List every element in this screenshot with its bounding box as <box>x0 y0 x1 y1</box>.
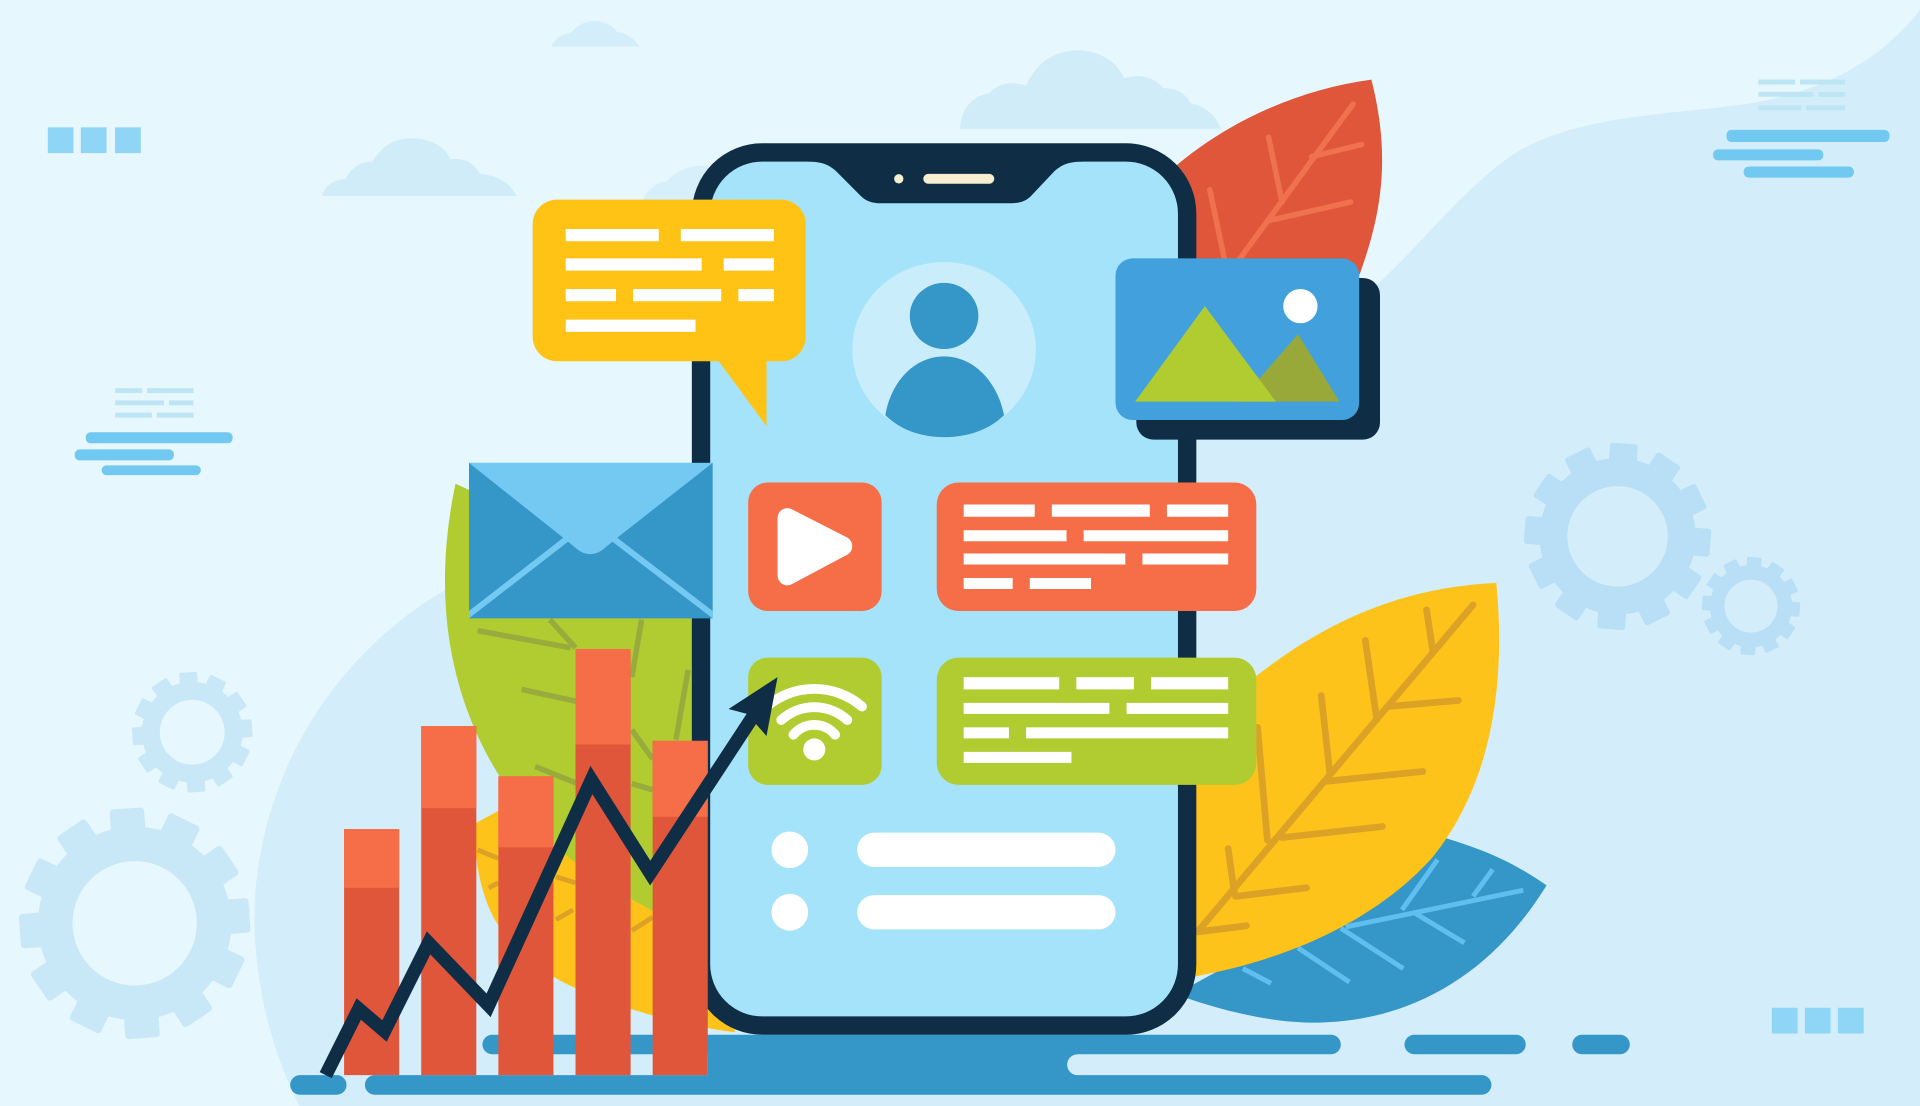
decorative lines: right <box>1713 80 1889 178</box>
green text card <box>937 658 1256 785</box>
bar 1 <box>344 829 399 1075</box>
gear: right large <box>1518 437 1717 636</box>
gear: left large <box>12 800 258 1046</box>
list dots and pills <box>771 831 1116 931</box>
ground bars <box>290 1035 1630 1095</box>
squares: bottom right <box>1772 1008 1864 1033</box>
wifi card <box>748 658 882 785</box>
cloud: behind phone <box>643 165 722 201</box>
cloud: centre large <box>960 50 1221 129</box>
trend arrow <box>326 677 778 1075</box>
leaf: blue <box>1176 835 1547 1023</box>
phone <box>701 152 1187 1026</box>
bar 5 <box>653 741 708 1075</box>
decorative lines: left <box>75 388 233 475</box>
phone body <box>701 152 1187 1026</box>
bar 2 <box>421 726 476 1075</box>
envelope <box>469 463 713 618</box>
leaf: red <box>1169 80 1382 276</box>
orange text card <box>937 482 1256 611</box>
leaf: yellow small <box>475 802 735 1032</box>
bar 4 <box>576 649 631 1075</box>
cloud: left <box>322 138 517 196</box>
speech bubble <box>533 200 806 426</box>
bar 3 <box>498 776 553 1075</box>
bar chart <box>344 649 708 1075</box>
cloud: top centre small <box>551 21 639 47</box>
play button <box>748 482 882 611</box>
leaf: yellow large <box>1176 583 1499 980</box>
gear: right small <box>1699 554 1803 658</box>
phone notch <box>808 157 1082 203</box>
phone speaker <box>923 174 994 184</box>
squares: top left <box>48 127 141 153</box>
avatar <box>852 262 1036 437</box>
leaf: green <box>445 484 704 933</box>
phone camera <box>894 174 903 183</box>
gear: left small <box>128 668 256 796</box>
image card <box>1116 258 1380 440</box>
